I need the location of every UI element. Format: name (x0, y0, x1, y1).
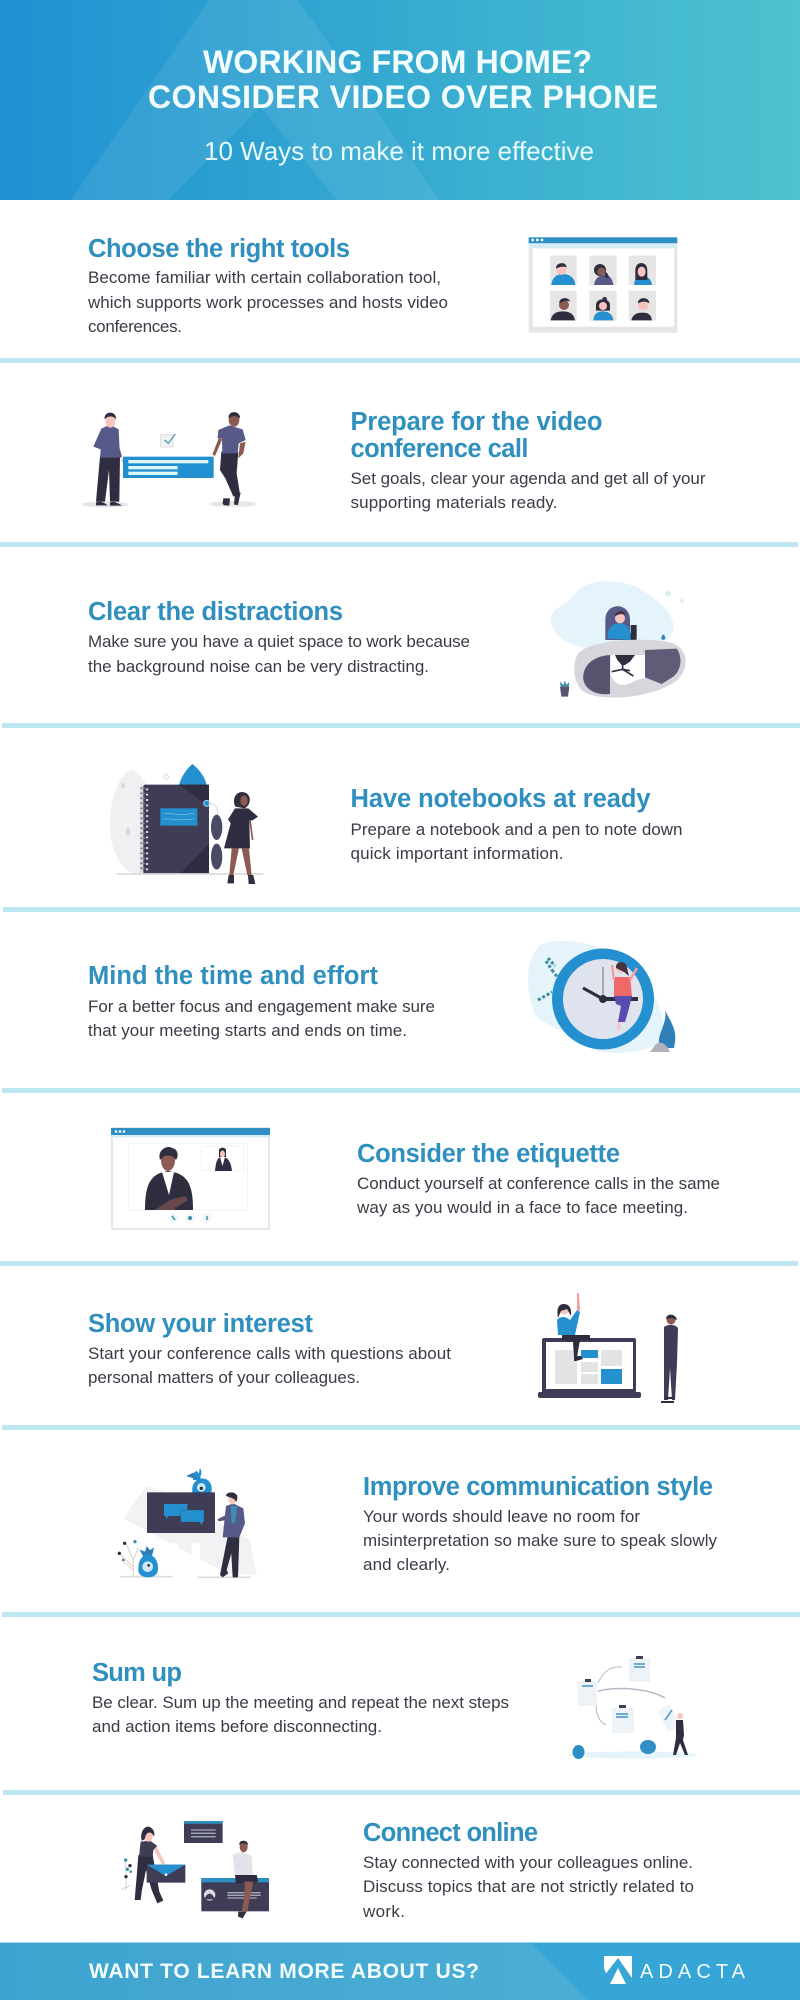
illustration: people with windows (122, 1821, 269, 1918)
heading: Consider the etiquette (357, 1140, 620, 1168)
divider (0, 542, 798, 547)
divider (0, 1261, 798, 1266)
body text: way as you would in a face to face meeting. (356, 1198, 688, 1217)
body text: Your words should leave no room for (363, 1507, 640, 1526)
illustration: video call grid (529, 237, 677, 333)
body text: Prepare a notebook and a pen to note down (350, 820, 682, 839)
body text: work. (362, 1902, 405, 1921)
section 9: sum up (92, 1656, 697, 1759)
title: CONSIDER VIDEO OVER PHONE (148, 79, 658, 115)
heading: Sum up (92, 1659, 182, 1687)
body text (363, 1507, 718, 1574)
illustration: laptop with two people (538, 1293, 678, 1403)
body text: Set goals, clear your agenda and get all of your (350, 469, 706, 488)
body text (362, 1853, 694, 1921)
body text: and action items before disconnecting. (92, 1717, 382, 1736)
divider (3, 907, 800, 912)
section 8: improve communication style (118, 1468, 717, 1577)
heading: Prepare for the video (350, 408, 602, 436)
body text (350, 469, 706, 512)
body text: Start your conference calls with questions about (88, 1344, 451, 1363)
section 5: mind the time and effort (88, 941, 675, 1053)
illustration: clock and woman (528, 941, 675, 1053)
body text (88, 997, 435, 1040)
illustration: two people with a card (82, 412, 256, 507)
body text: supporting materials ready. (350, 493, 558, 512)
illustration: clipboards and man (567, 1656, 697, 1759)
body text (350, 820, 682, 863)
heading: Have notebooks at ready (350, 785, 651, 813)
subtitle: 10 Ways to make it more effective (204, 136, 594, 166)
header banner (0, 0, 800, 200)
heading: Clear the distractions (88, 598, 343, 626)
body text: the background noise can be very distracting. (88, 657, 429, 676)
section 3: clear the distractions (88, 581, 686, 698)
section 7: show your interest (88, 1293, 678, 1403)
heading (350, 408, 602, 463)
body text (87, 268, 448, 336)
body text: Discuss topics that are not strictly related to (363, 1877, 694, 1896)
illustration: person at curved desk (551, 581, 686, 698)
body text: For a better focus and engagement make sure (88, 997, 435, 1016)
body text: quick important information. (350, 844, 564, 863)
body text: Be clear. Sum up the meeting and repeat the next steps (92, 1693, 509, 1712)
body text: personal matters of your colleagues. (88, 1368, 360, 1387)
divider (3, 1790, 800, 1795)
body text (356, 1174, 720, 1217)
section 1: choose the right tools (87, 235, 677, 336)
heading: conference call (350, 435, 528, 463)
divider (2, 723, 800, 728)
heading: Improve communication style (363, 1473, 713, 1501)
section 4: have notebooks at ready (110, 764, 682, 884)
section 10: connect online (122, 1819, 694, 1921)
body text: and clearly. (363, 1555, 450, 1574)
divider (2, 1612, 800, 1617)
body text: conferences. (88, 317, 182, 336)
body text: Become familiar with certain collaboration tool, (88, 268, 441, 287)
section 6: consider the etiquette (111, 1128, 720, 1229)
body text (88, 1344, 451, 1387)
body text: misinterpretation so make sure to speak slowly (363, 1531, 718, 1550)
logo: ADACTA (640, 1961, 746, 1983)
call to action: WANT TO LEARN MORE ABOUT US? (89, 1960, 479, 1983)
title: WORKING FROM HOME? (203, 44, 592, 80)
heading: Choose the right tools (88, 235, 350, 263)
logo (604, 1956, 746, 1984)
body text (92, 1693, 509, 1736)
divider (0, 358, 800, 363)
body text: which supports work processes and hosts video (87, 293, 448, 312)
body text: Conduct yourself at conference calls in the same (357, 1174, 720, 1193)
heading: Mind the time and effort (88, 962, 378, 990)
section 2: prepare for the video conference call (82, 408, 706, 512)
title (148, 44, 658, 115)
illustration: video call window (111, 1128, 270, 1229)
body text: Make sure you have a quiet space to work because (88, 632, 470, 651)
illustration: notebook and woman (110, 764, 263, 884)
heading: Show your interest (88, 1310, 314, 1338)
body text: that your meeting starts and ends on time. (88, 1021, 407, 1040)
divider (2, 1088, 800, 1093)
illustration: man presenting chat board (118, 1468, 257, 1577)
divider (2, 1425, 800, 1430)
body text: Stay connected with your colleagues online. (363, 1853, 693, 1872)
heading: Connect online (363, 1819, 538, 1847)
footer banner (0, 1942, 800, 2000)
body text (88, 632, 470, 676)
